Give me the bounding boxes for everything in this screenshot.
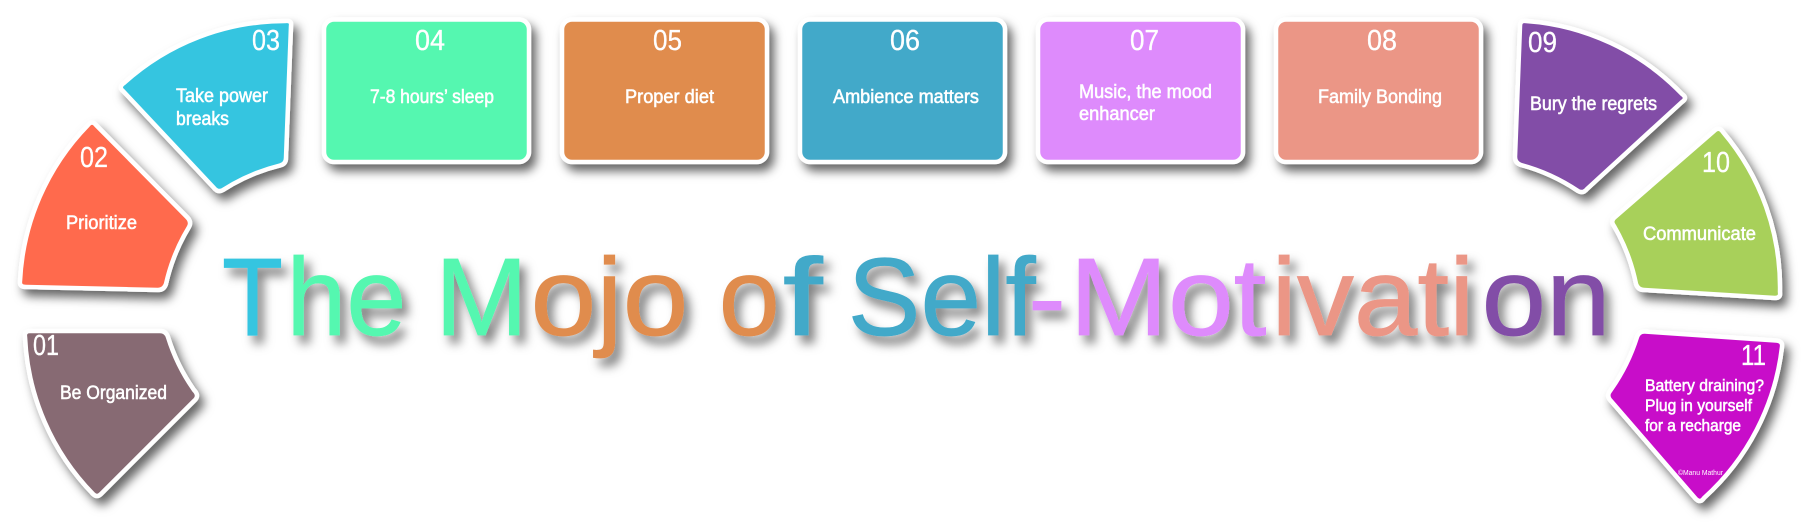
- title: he: [286, 236, 406, 359]
- panel: 08 Family Bonding: [1276, 20, 1481, 162]
- title: o: [719, 236, 780, 359]
- panel: 07 Music, the mood enhancer: Music, the mood: [1079, 81, 1212, 103]
- panel: 07 Music, the mood enhancer: [1038, 20, 1243, 162]
- panel: 11 Battery draining: 11: [1741, 340, 1766, 372]
- panel: 11 Battery draining: Battery draining?: [1645, 376, 1764, 395]
- panel: 06 Ambience matters: 06: [890, 25, 920, 57]
- panel: 10 Communicate: [1612, 129, 1780, 298]
- panel: 06 Ambience matters: [800, 20, 1005, 162]
- panel: 03 Take power breaks: 03: [252, 25, 280, 57]
- panel: 01 Be Organized: Be Organized: [60, 382, 167, 404]
- panel: 03 Take power breaks: Take power: [176, 85, 268, 107]
- title: T: [222, 236, 283, 359]
- credit: ©Manu Mathur: [1678, 468, 1723, 477]
- panel: 08 Family Bonding: 08: [1367, 25, 1397, 57]
- panel: 02 Prioritize: Prioritize: [66, 212, 137, 234]
- panel: 02 Prioritize: 02: [80, 142, 108, 174]
- panel: 01 Be Organized: [25, 330, 197, 496]
- panel: 09 Bury the regrets: [1515, 21, 1685, 192]
- title: Mot: [1070, 236, 1266, 359]
- panel: 05 Proper diet: Proper diet: [625, 86, 715, 108]
- panel: 04 7-8 hours' sleep: [324, 20, 529, 162]
- panel: 02 Prioritize: [20, 122, 190, 290]
- panel: 06 Ambience matters: Ambience matters: [833, 86, 979, 108]
- title: M: [435, 236, 528, 359]
- panel: 05 Proper diet: 05: [653, 25, 682, 57]
- panel: 09 Bury the regrets: Bury the regrets: [1530, 93, 1657, 115]
- panel: 07 Music, the mood enhancer: enhancer: [1079, 103, 1155, 125]
- panel: 11 Battery draining: [1608, 331, 1782, 501]
- title: -: [1028, 236, 1066, 359]
- title: f: [783, 236, 823, 359]
- panel: 03 Take power breaks: breaks: [176, 108, 229, 130]
- panel: 03 Take power breaks: [121, 21, 291, 191]
- panel: 05 Proper diet: [562, 20, 767, 162]
- panel: 08 Family Bonding: Family Bonding: [1318, 86, 1442, 108]
- panel: 10 Communicate: 10: [1702, 147, 1730, 179]
- panel: 04 7-8 hours' sleep: 04: [415, 25, 445, 57]
- title: ojo: [530, 236, 688, 359]
- panel: 09 Bury the regrets: 09: [1528, 27, 1557, 59]
- panel: 10 Communicate: Communicate: [1643, 223, 1756, 245]
- title: on: [1482, 236, 1611, 359]
- panel: 07 Music, the mood enhancer: 07: [1130, 25, 1159, 57]
- panel: 11 Battery draining: Plug in yourself: [1645, 396, 1752, 415]
- panel: 01 Be Organized: 01: [33, 330, 59, 362]
- panel: 11 Battery draining: for a recharge: [1645, 416, 1741, 435]
- title: [222, 236, 1611, 359]
- panel: 04 7-8 hours' sleep: 7-8 hours’ sleep: [370, 86, 494, 108]
- title: ivati: [1272, 236, 1474, 359]
- title: Self: [848, 236, 1036, 359]
